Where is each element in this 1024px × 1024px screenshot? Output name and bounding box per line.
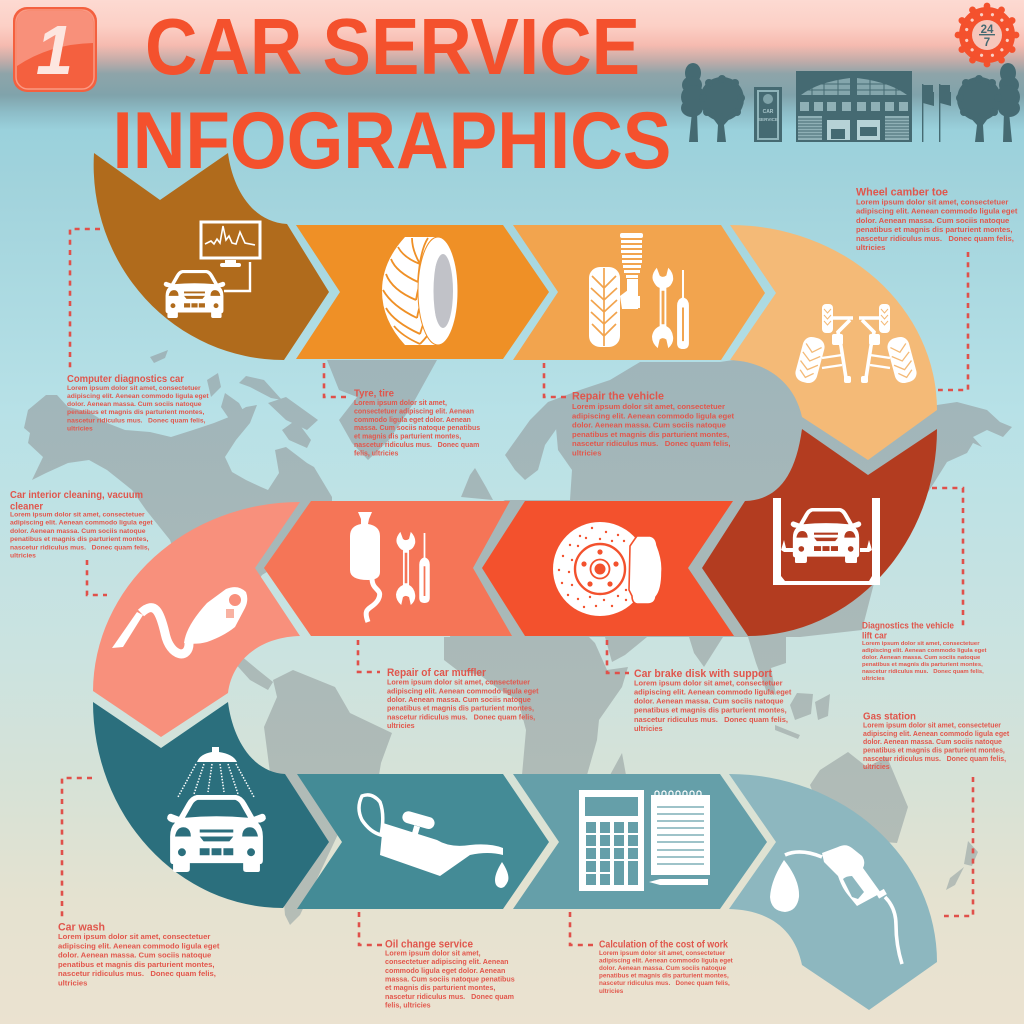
callout: computer diagnostics car <box>67 374 209 432</box>
callout: car brake disk with support: Car brake disk with support <box>634 668 772 680</box>
callout: wheel camber toe: ultricies <box>856 243 885 252</box>
callout: repair the vehicle: ultricies <box>572 448 601 457</box>
callout: wheel camber toe: dolor. Aenean massa. Cum sociis natoque <box>856 216 1009 225</box>
connector: repair <box>544 363 567 397</box>
callout: repair of car muffler: penatibus et magnis dis parturient montes, <box>387 704 534 713</box>
callout: car interior cleaning: nascetur ridiculus mus. Donec quam felis, <box>10 544 150 551</box>
ribbon segment <box>482 501 734 636</box>
callout: calculation of the cost of work: Lorem ipsum dolor sit amet, consectetuer <box>599 950 726 957</box>
ribbon segment <box>702 429 937 636</box>
callout: gas station <box>863 710 1010 771</box>
callout: calculation of the cost of work <box>599 940 734 995</box>
ribbon segment <box>729 774 937 1010</box>
callout: calculation of the cost of work: ultricies <box>599 988 624 995</box>
icon: oil can and drop <box>359 795 508 888</box>
callout: car wash: dolor. Aenean massa. Cum sociis natoque <box>58 951 211 960</box>
icon: suspension strut, wrench and screwdriver <box>589 233 689 349</box>
callout: car wash: Car wash <box>58 922 105 934</box>
callout: oil change service: felis, ultricies <box>385 1002 431 1010</box>
title <box>112 3 671 186</box>
callout: car interior cleaning: Lorem ipsum dolor sit amet, consectetuer <box>10 512 145 518</box>
callout: gas station: dolor. Aenean massa. Cum sociis natoque <box>863 739 1002 746</box>
step 3: repair the vehicle <box>513 225 765 360</box>
callout: car interior cleaning: dolor. Aenean massa. Cum sociis natoque <box>10 528 146 535</box>
connector: car wash <box>62 778 92 917</box>
callout: car brake disk with support: penatibus et magnis dis parturient montes, <box>634 706 787 715</box>
ribbon segment <box>513 774 767 909</box>
callout: calculation of the cost of work: dolor. Aenean massa. Cum sociis natoque <box>599 965 726 972</box>
ribbon segment <box>264 501 512 636</box>
callout: car wash <box>58 922 220 987</box>
callout: repair of car muffler: nascetur ridiculus mus. Donec quam felis, <box>387 712 535 721</box>
ribbon segment <box>93 702 329 908</box>
callout: tyre, tire: Lorem ipsum dolor sit amet, <box>354 400 447 407</box>
badge: number 1: 1 <box>36 11 73 89</box>
callout: computer diagnostics car: adipiscing elit. Aenean commodo ligula eget <box>67 393 209 400</box>
callout: car wash: adipiscing elit. Aenean commodo ligula eget <box>58 941 220 950</box>
icon: car and diagnostic monitor <box>164 222 260 318</box>
callout: diagnostics the vehicle lift car: nascetur ridiculus mus. Donec quam felis, <box>862 669 984 675</box>
icon: car under shower <box>167 747 266 872</box>
callout: tyre, tire: et magnis dis parturient montes, <box>354 434 461 441</box>
connector: gas station <box>944 777 973 916</box>
callout: repair the vehicle: Lorem ipsum dolor sit amet, consectetuer <box>572 402 725 411</box>
callout: calculation of the cost of work: adipiscing elit. Aenean commodo ligula eget <box>599 957 734 964</box>
callout: diagnostics the vehicle lift car: Diagnostics the vehicle <box>862 620 954 630</box>
callout: diagnostics the vehicle lift car: dolor. Aenean massa. Cum sociis natoque <box>862 655 981 661</box>
ribbon segment <box>94 153 329 360</box>
callout: repair of car muffler: dolor. Aenean massa. Cum sociis natoque <box>387 695 531 704</box>
step 6: brake disk <box>482 501 734 636</box>
callout: tyre, tire: massa. Cum sociis natoque penatibus <box>354 425 480 432</box>
callout: wheel camber toe: adipiscing elit. Aenean commodo ligula eget <box>856 207 1018 216</box>
icon: muffler, wrench and screwdriver <box>350 512 430 622</box>
connector: vacuum <box>87 560 107 595</box>
callout: tyre, tire: Tyre, tire <box>354 388 394 400</box>
callout: oil change service: massa. Cum sociis natoque penatibus <box>385 976 515 984</box>
callout: diagnostics the vehicle lift car: lift car <box>862 630 887 640</box>
service sign: CAR <box>763 109 774 115</box>
callout: repair the vehicle: Repair the vehicle <box>572 390 664 402</box>
callout: computer diagnostics car: Lorem ipsum dolor sit amet, consectetuer <box>67 385 201 392</box>
callout: gas station: adipiscing elit. Aenean commodo ligula eget <box>863 731 1010 738</box>
callout: car interior cleaning <box>10 490 153 560</box>
title: INFOGRAPHICS <box>112 95 671 186</box>
ribbon segment <box>296 225 549 359</box>
badge: number 1 <box>13 7 97 92</box>
step 5: lift diagnostics <box>702 429 937 636</box>
callout: repair of car muffler: Repair of car muffler <box>387 667 486 679</box>
callout: repair of car muffler: adipiscing elit. Aenean commodo ligula eget <box>387 686 539 695</box>
connector: tyre <box>324 363 347 397</box>
right trees <box>956 63 1020 142</box>
step 1: computer diagnostics <box>94 153 329 360</box>
callout: wheel camber toe: nascetur ridiculus mus. Donec quam felis, <box>856 234 1014 243</box>
icon: tyre <box>382 237 458 345</box>
icon: car on lift <box>773 498 880 585</box>
callout: gas station: nascetur ridiculus mus. Donec quam felis, <box>863 756 1006 763</box>
callout: car interior cleaning: ultricies <box>10 552 36 560</box>
callout: car brake disk with support: nascetur ridiculus mus. Donec quam felis, <box>634 715 788 724</box>
callout: gas station: penatibus et magnis dis parturient montes, <box>863 747 1005 754</box>
callout: oil change service: consectetuer adipiscing elit. Aenean <box>385 958 509 966</box>
callout: computer diagnostics car: ultricies <box>67 425 93 432</box>
service building <box>796 71 912 142</box>
callout: car interior cleaning: penatibus et magnis dis parturient montes, <box>10 536 148 543</box>
callout: repair of car muffler: Lorem ipsum dolor sit amet, consectetuer <box>387 678 530 687</box>
step 12: gas station <box>729 774 937 1010</box>
connector: cost calculation <box>570 912 593 945</box>
callout: car brake disk with support: dolor. Aenean massa. Cum sociis natoque <box>634 697 784 706</box>
callout: tyre, tire: nascetur ridiculus mus. Donec quam <box>354 442 479 449</box>
connector: brake <box>607 640 629 673</box>
callout: computer diagnostics car: dolor. Aenean massa. Cum sociis natoque <box>67 401 202 408</box>
callout: repair the vehicle: penatibus et magnis dis parturient montes, <box>572 430 729 439</box>
flags <box>922 84 951 142</box>
icon: fuel nozzle and drop <box>770 845 902 964</box>
callout: tyre, tire: consectetuer adipiscing elit. Aenean <box>354 408 474 415</box>
callout: repair the vehicle: adipiscing elit. Aenean commodo ligula eget <box>572 411 734 420</box>
step 2: tyre <box>296 225 549 359</box>
ribbon segment <box>730 225 937 460</box>
step 7: muffler repair <box>264 501 512 636</box>
callout: oil change service <box>385 938 515 1010</box>
callout: oil change service: Oil change service <box>385 938 473 950</box>
icon: 24/7 gear <box>955 3 1019 67</box>
connector: muffler <box>358 640 380 672</box>
callout: calculation of the cost of work: nascetur ridiculus mus. Donec quam felis, <box>599 980 730 987</box>
callout: repair the vehicle: nascetur ridiculus mus. Donec quam felis, <box>572 439 730 448</box>
callout: car interior cleaning: Car interior cleaning, vacuum <box>10 490 143 501</box>
callout: car brake disk with support: adipiscing elit. Aenean commodo ligula eget <box>634 688 792 697</box>
callout: gas station: ultricies <box>863 764 890 771</box>
callout: oil change service: Lorem ipsum dolor sit amet, <box>385 950 481 958</box>
callout: computer diagnostics car: nascetur ridiculus mus. Donec quam felis, <box>67 417 206 424</box>
callout: car brake disk with support: ultricies <box>634 724 663 733</box>
callout: car brake disk with support: Lorem ipsum dolor sit amet, consectetuer <box>634 678 783 688</box>
callout: wheel camber toe: penatibus et magnis dis parturient montes, <box>856 225 1013 234</box>
icon: car vacuum cleaner <box>112 587 247 654</box>
connector: computer diagnostics <box>70 229 100 372</box>
callout: repair of car muffler <box>387 667 539 730</box>
callout: car interior cleaning: cleaner <box>10 502 43 512</box>
callout: diagnostics the vehicle lift car: adipiscing elit. Aenean commodo ligula eget <box>862 648 987 654</box>
callout: calculation of the cost of work: penatibus et magnis dis parturient montes, <box>599 973 729 980</box>
icon: 24/7 gear: 24 <box>981 24 994 36</box>
icon: calculator, notebook and pen <box>579 790 710 891</box>
callout: oil change service: commodo ligula eget dolor. Aenean <box>385 967 505 975</box>
skyline: trees, sign and service building <box>681 63 1020 142</box>
callout: gas station: Gas station <box>863 710 916 722</box>
callout: oil change service: et magnis dis parturient montes, <box>385 984 495 992</box>
callout: wheel camber toe <box>856 186 1018 252</box>
callout: tyre, tire: commodo ligula eget dolor. Aenean <box>354 417 471 424</box>
connector: wheel camber <box>938 252 968 390</box>
callout: diagnostics the vehicle lift car: ultricies <box>862 676 885 682</box>
callout: oil change service: nascetur ridiculus mus. Donec quam <box>385 993 514 1001</box>
callout: car wash: nascetur ridiculus mus. Donec quam felis, <box>58 969 216 978</box>
callout: car wash: Lorem ipsum dolor sit amet, consectetuer <box>58 932 210 941</box>
ribbon segment <box>297 774 549 909</box>
service sign: SERVICE <box>758 117 778 122</box>
callout: diagnostics the vehicle lift car: penatibus et magnis dis parturient montes, <box>862 662 983 668</box>
callout: car brake disk with support <box>634 668 792 733</box>
callout: calculation of the cost of work: Calculation of the cost of work <box>599 940 728 950</box>
title: CAR SERVICE <box>145 3 640 92</box>
callout: tyre, tire <box>354 388 480 457</box>
ribbon segment <box>513 225 765 360</box>
service sign <box>754 87 782 142</box>
step 9: car wash <box>93 702 329 908</box>
callout: car wash: penatibus et magnis dis parturient montes, <box>58 960 215 969</box>
callout: computer diagnostics car: penatibus et magnis dis parturient montes, <box>67 409 205 416</box>
step 10: oil change <box>297 774 549 909</box>
callout: repair the vehicle <box>572 390 734 457</box>
callout: tyre, tire: felis, ultricies <box>354 450 398 457</box>
callout: diagnostics the vehicle lift car: Lorem ipsum dolor sit amet, consectetuer <box>862 641 980 647</box>
callout: car wash: ultricies <box>58 978 87 987</box>
callout: gas station: Lorem ipsum dolor sit amet, consectetuer <box>863 722 1001 730</box>
world map <box>24 350 1012 925</box>
icon: wheel alignment axles <box>793 304 919 385</box>
step 8: vacuum cleaner <box>93 502 300 737</box>
ribbon segment <box>93 502 300 737</box>
callout: diagnostics the vehicle lift car <box>862 620 987 682</box>
callout: wheel camber toe: Wheel camber toe <box>856 186 948 198</box>
left trees <box>681 63 745 142</box>
step 4: wheel camber toe <box>730 225 937 460</box>
icon: brake disk and caliper <box>553 522 662 616</box>
callout: wheel camber toe: Lorem ipsum dolor sit amet, consectetuer <box>856 198 1008 206</box>
callout: car interior cleaning: adipiscing elit. Aenean commodo ligula eget <box>10 520 153 527</box>
callout: repair the vehicle: dolor. Aenean massa. Cum sociis natoque <box>572 420 727 430</box>
callout: computer diagnostics car: Computer diagnostics car <box>67 374 184 385</box>
connector: oil change <box>359 912 383 945</box>
step 11: cost calculation <box>513 774 767 909</box>
connector: lift diagnostics <box>932 488 963 627</box>
callout: repair of car muffler: ultricies <box>387 721 415 730</box>
icon: 24/7 gear: 7 <box>984 37 990 49</box>
